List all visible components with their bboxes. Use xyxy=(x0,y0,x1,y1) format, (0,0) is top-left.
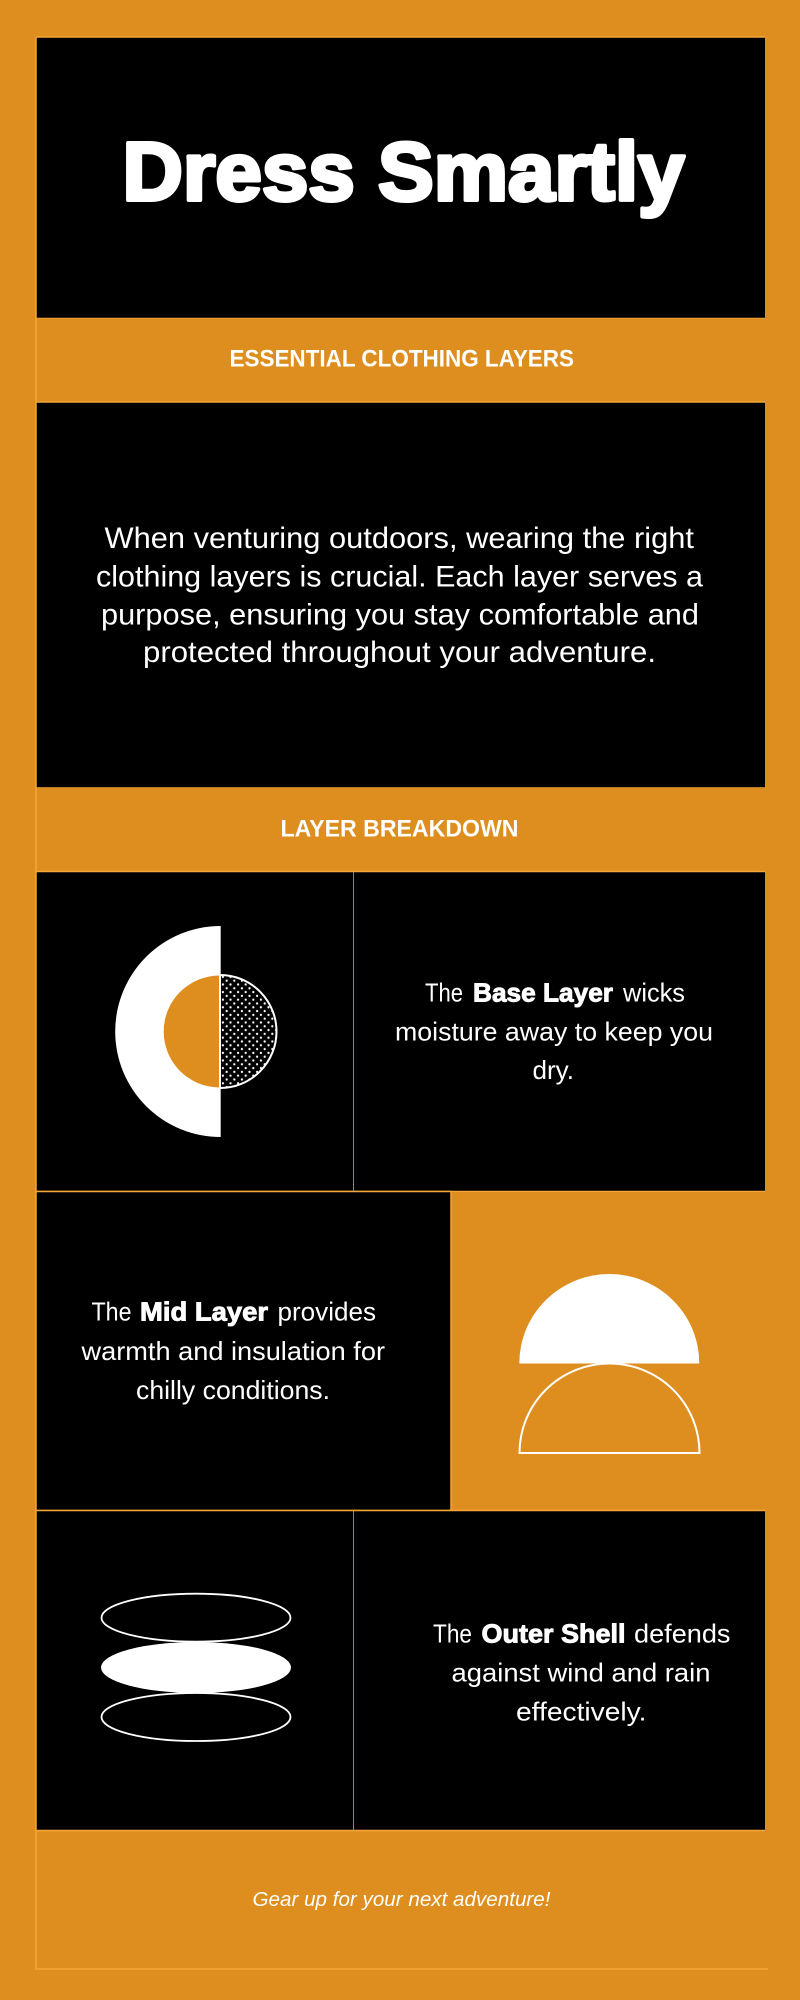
base layer description: moisture away to keep you xyxy=(395,1016,713,1046)
panel: section heading essential clothing layers xyxy=(36,318,765,402)
mid layer description: warmth and insulation for xyxy=(80,1336,385,1366)
outer shell description: defends xyxy=(634,1618,730,1648)
mid layer description: The xyxy=(92,1296,132,1326)
base layer description xyxy=(395,978,713,1085)
panel: outer shell text xyxy=(354,1510,765,1830)
icon: outer shell ellipses xyxy=(101,1594,291,1741)
intro text xyxy=(96,522,703,669)
base layer description: Base Layer xyxy=(473,978,613,1008)
panel: section heading layer breakdown xyxy=(36,788,765,871)
panel: intro xyxy=(36,402,765,788)
outer shell description: effectively. xyxy=(516,1696,646,1726)
base layer description: dry. xyxy=(532,1055,574,1085)
heading: LAYER BREAKDOWN xyxy=(280,816,518,842)
intro text: purpose, ensuring you stay comfortable and xyxy=(101,598,699,632)
intro text: When venturing outdoors, wearing the right xyxy=(104,522,695,555)
outer shell description: The xyxy=(433,1618,472,1648)
outer shell description: Outer Shell xyxy=(482,1618,626,1648)
intro text: protected throughout your adventure. xyxy=(143,636,656,669)
title: Dress Smartly xyxy=(122,125,684,218)
panel: base layer icon xyxy=(36,872,354,1192)
mid layer description xyxy=(80,1296,385,1405)
base layer description: wicks xyxy=(622,978,685,1008)
outer shell description xyxy=(433,1618,730,1726)
intro text: clothing layers is crucial. Each layer serves a xyxy=(96,560,703,594)
panel: outer shell icon xyxy=(36,1510,354,1830)
panel: mid layer text xyxy=(36,1192,451,1510)
panel: base layer text xyxy=(354,872,765,1192)
mid layer description: Mid Layer xyxy=(140,1296,268,1326)
outer shell description: against wind and rain xyxy=(452,1658,710,1688)
mid layer description: chilly conditions. xyxy=(136,1375,330,1405)
footer tagline: Gear up for your next adventure! xyxy=(252,1889,551,1911)
icon: mid layer half circles xyxy=(519,1274,700,1453)
mid layer description: provides xyxy=(278,1296,376,1326)
panel: mid layer icon xyxy=(452,1192,765,1510)
heading: ESSENTIAL CLOTHING LAYERS xyxy=(230,346,574,372)
panel: title xyxy=(36,37,765,318)
base layer description: The xyxy=(425,978,463,1008)
panel: footer xyxy=(36,1831,768,1969)
icon: base layer half circles xyxy=(115,926,276,1137)
